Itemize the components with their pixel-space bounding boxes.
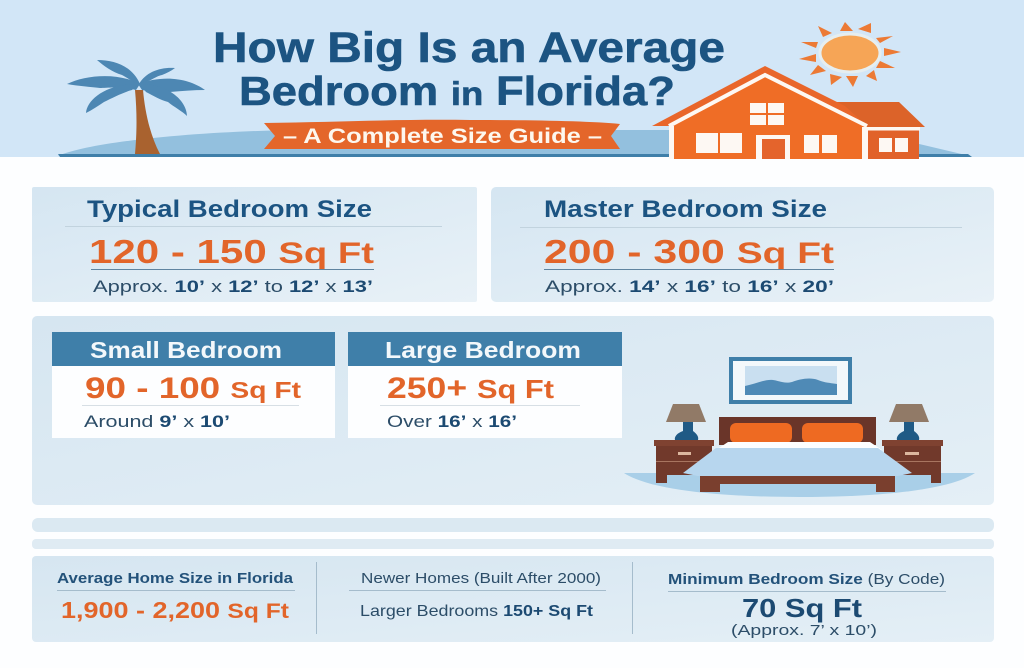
stat: minimum bedroom size xyxy=(668,571,946,639)
stat: minimum bedroom size: (Approx. 7’ x 10’) xyxy=(731,622,877,639)
title: How Big Is an Average xyxy=(213,24,725,72)
panel: master bedroom size: Approx. 14’ x 16’ to 16’ x 20’ xyxy=(545,277,834,296)
stat: average home size: Average Home Size in Florida xyxy=(57,570,294,587)
title xyxy=(213,24,725,114)
illustration: bedroom xyxy=(624,359,975,497)
framed picture xyxy=(731,359,850,402)
stat: minimum bedroom size: Minimum Bedroom Size (By Code) xyxy=(668,571,945,588)
panel: bottom statistics xyxy=(32,556,994,642)
bed frame xyxy=(700,476,895,492)
panel: typical bedroom size: 120 - 150 Sq Ft xyxy=(89,233,374,270)
right lamp xyxy=(889,404,929,440)
panel: typical bedroom size xyxy=(32,187,477,302)
card: large bedroom: Large Bedroom xyxy=(385,337,581,363)
stat: newer homes xyxy=(349,570,606,620)
icon: sun xyxy=(799,22,901,87)
card: small bedroom: Small Bedroom xyxy=(90,337,282,363)
mattress xyxy=(716,442,882,450)
strip: lower divider band xyxy=(32,539,994,549)
header banner xyxy=(0,0,1024,159)
icon: palm tree xyxy=(67,60,205,154)
headboard xyxy=(719,417,876,445)
subtitle ribbon: – A Complete Size Guide – xyxy=(283,125,602,148)
blanket xyxy=(683,448,912,476)
card: small bedroom: 90 - 100 Sq Ft xyxy=(85,372,301,405)
left nightstand xyxy=(654,440,714,483)
stat: newer homes: Larger Bedrooms 150+ Sq Ft xyxy=(360,603,594,620)
left lamp xyxy=(666,404,706,440)
strip: upper divider band xyxy=(32,518,994,532)
stat: minimum bedroom size: 70 Sq Ft xyxy=(742,593,862,623)
pillows xyxy=(730,423,863,443)
title: Bedroom in Florida? xyxy=(239,68,675,114)
stat: newer homes: Newer Homes (Built After 2000) xyxy=(361,570,601,587)
island hill xyxy=(58,130,972,157)
right nightstand xyxy=(882,440,943,483)
panel: typical bedroom size: Approx. 10’ x 12’ to 12’ x 13’ xyxy=(93,277,373,296)
icon: house xyxy=(652,66,925,159)
card: large bedroom: 250+ Sq Ft xyxy=(387,372,554,405)
card: small bedroom xyxy=(52,332,335,438)
panel: room sizes and bedroom illustration xyxy=(32,316,994,505)
panel: master bedroom size: 200 - 300 Sq Ft xyxy=(544,233,834,270)
card: large bedroom xyxy=(348,332,622,438)
panel: master bedroom size xyxy=(491,187,994,302)
card: large bedroom: Over 16’ x 16’ xyxy=(387,412,517,431)
panel: typical bedroom size: Typical Bedroom Size xyxy=(87,196,372,223)
panel: master bedroom size: Master Bedroom Size xyxy=(544,196,827,223)
stat: average home size xyxy=(57,570,295,623)
card: small bedroom: Around 9’ x 10’ xyxy=(84,412,230,431)
floor rug xyxy=(624,473,975,497)
subtitle ribbon xyxy=(264,120,620,149)
stat: average home size: 1,900 - 2,200 Sq Ft xyxy=(61,597,289,623)
